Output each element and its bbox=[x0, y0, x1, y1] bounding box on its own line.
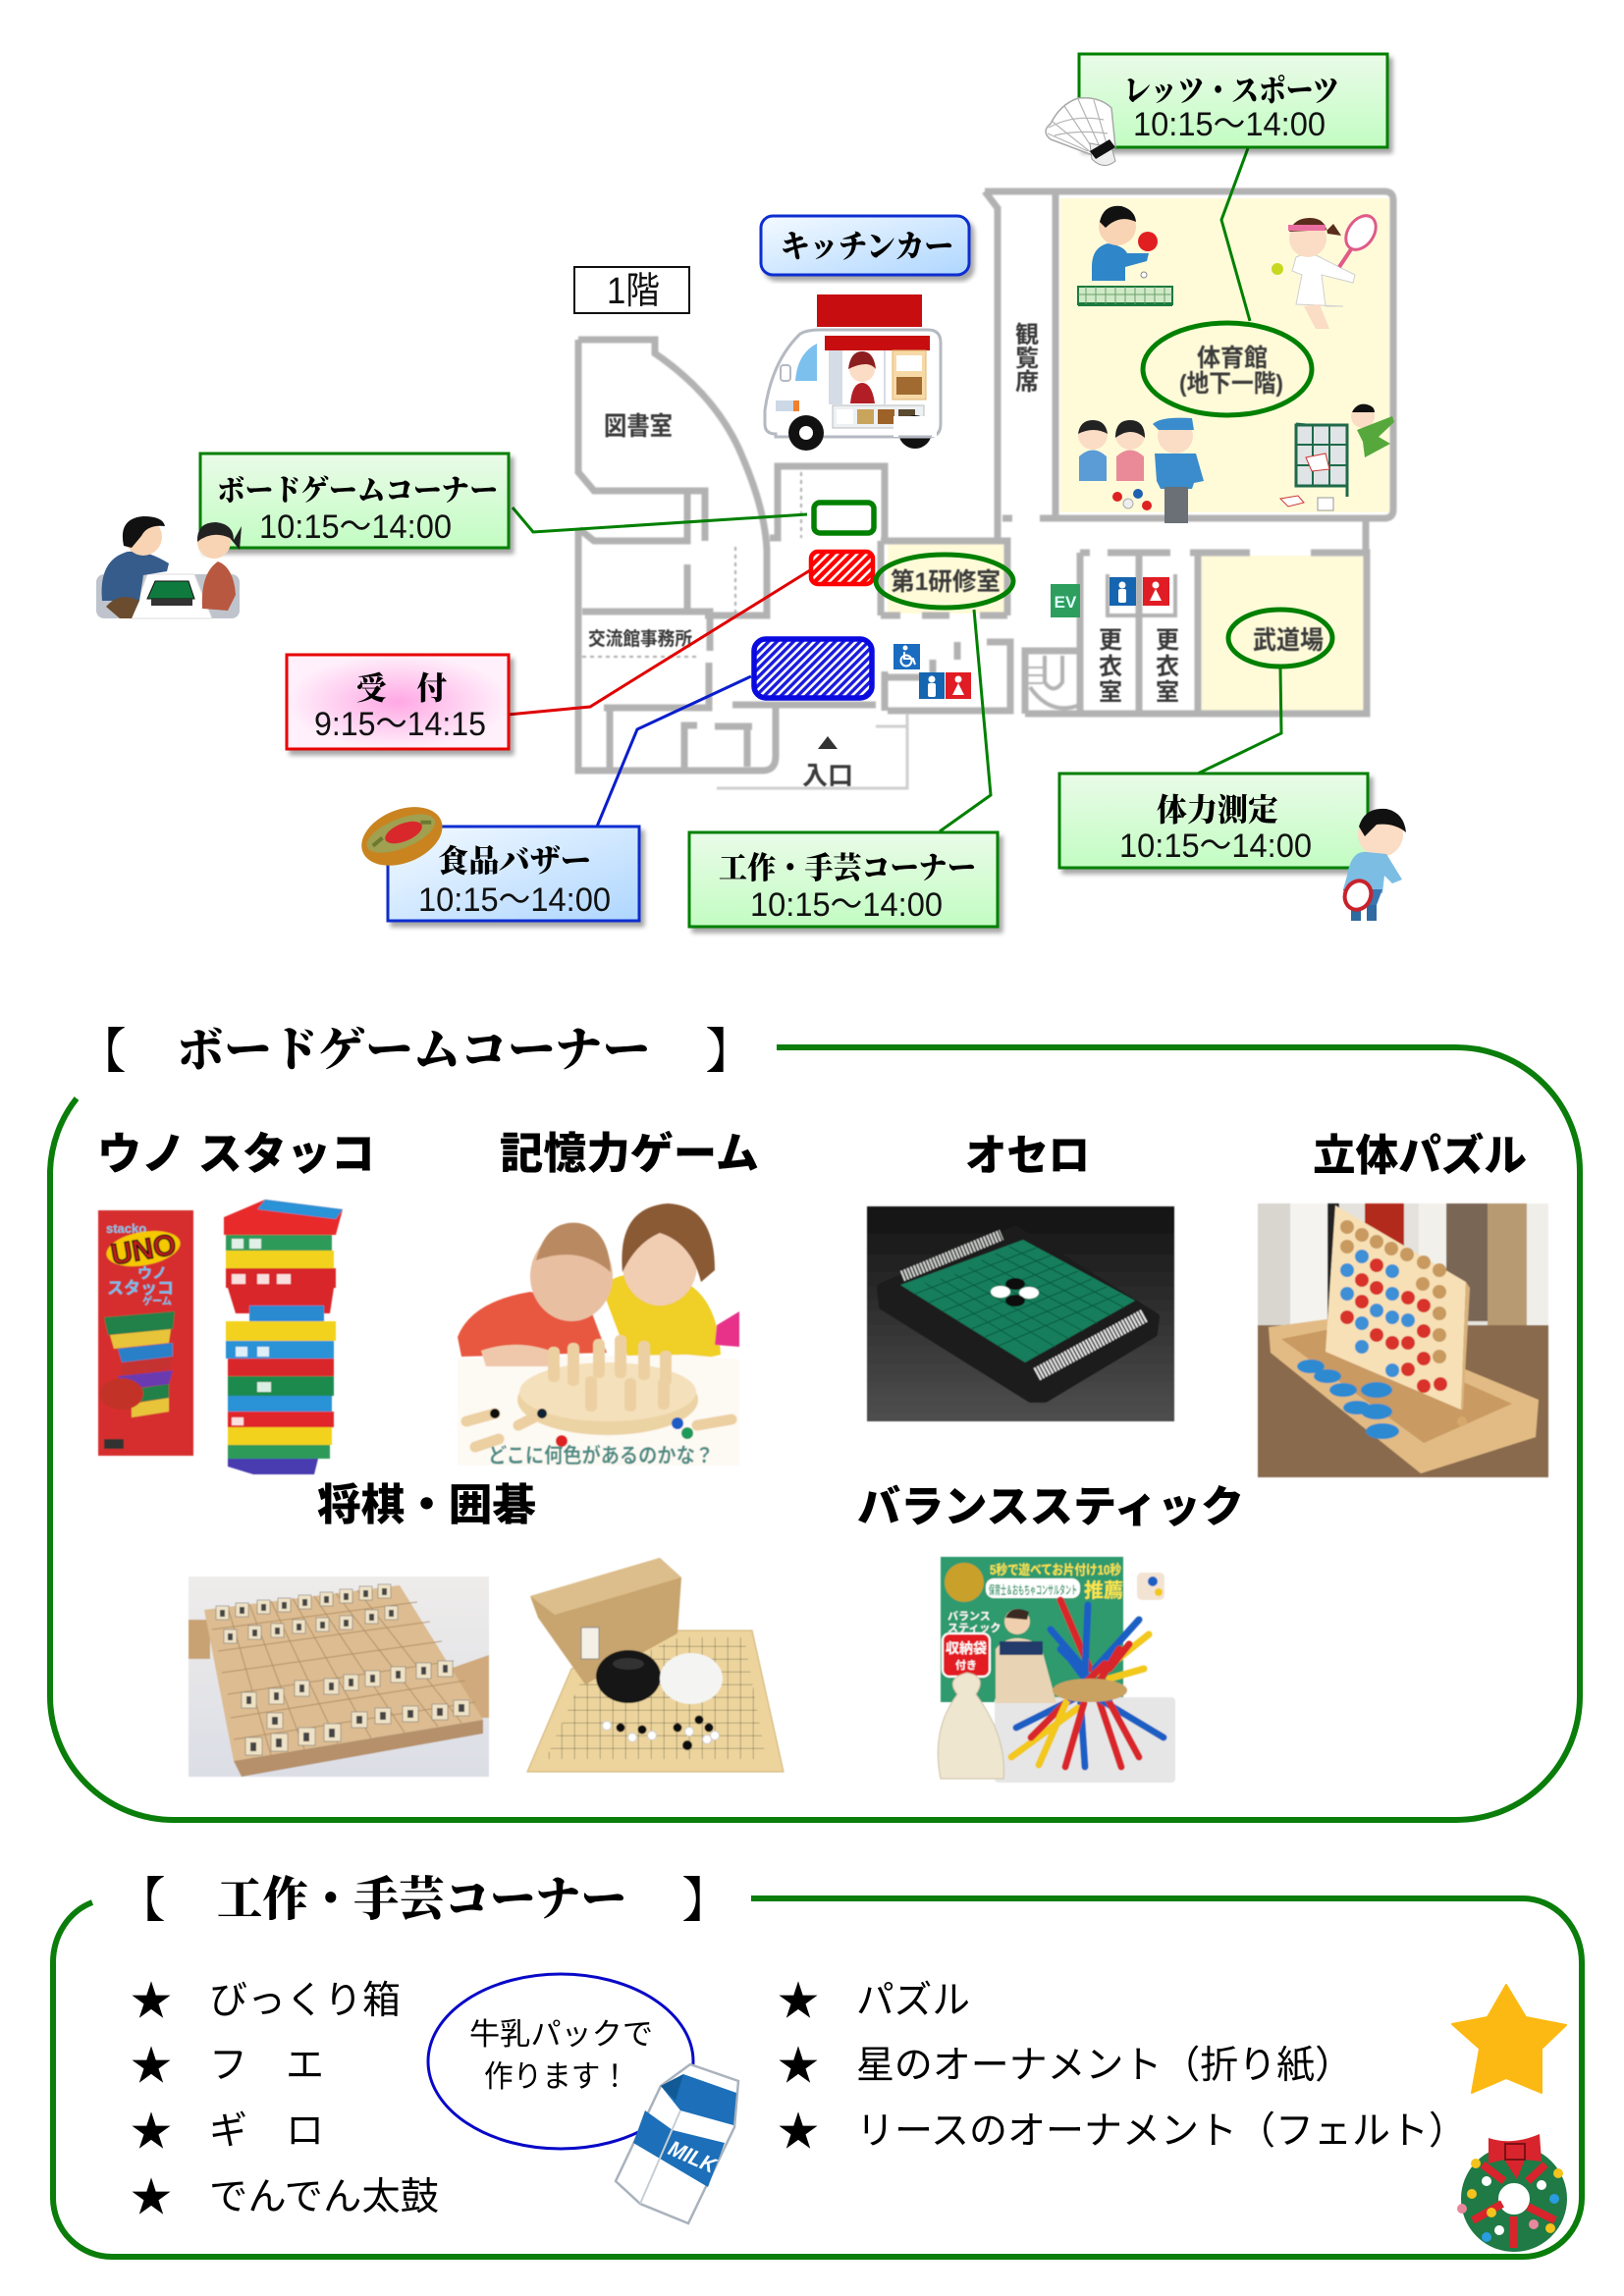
craft list right bbox=[778, 1978, 1467, 2155]
photo: balance stick: 推薦 bbox=[1084, 1579, 1123, 1602]
map labels: 体育館 bbox=[1197, 345, 1268, 372]
callout: reception: 受 付 bbox=[356, 670, 447, 706]
callout: fitness bbox=[1059, 774, 1368, 868]
callout: board game: ボードゲームコーナー bbox=[217, 475, 498, 507]
connector: bazaar bbox=[597, 676, 751, 827]
icon: gold star bbox=[1452, 1985, 1566, 2093]
map labels: 更 bbox=[1156, 627, 1179, 654]
callout: food bazaar bbox=[388, 827, 639, 921]
callout: sports bbox=[1079, 54, 1387, 147]
craft list left: ★ bbox=[131, 2174, 172, 2220]
callout: craft: 10:15～14:00 bbox=[750, 886, 943, 924]
connector: craft bbox=[940, 610, 991, 831]
marker: reception bbox=[811, 552, 873, 584]
title: UNO Stacko: ウノ スタッコ bbox=[97, 1129, 375, 1179]
marker: food bazaar bbox=[754, 639, 872, 698]
floor map bbox=[578, 191, 1393, 790]
photo: UNO Stacko box: UNO bbox=[109, 1228, 179, 1272]
connector: reception bbox=[508, 570, 810, 715]
heading: craft corner: 工作・手芸コーナー bbox=[217, 1874, 626, 1926]
panel frame: craft corner bbox=[53, 1898, 1582, 2257]
floor label bbox=[574, 267, 689, 313]
connector: board game bbox=[513, 507, 807, 532]
callout: board game bbox=[200, 454, 509, 548]
callout: craft bbox=[689, 832, 998, 927]
floor label: 1階 bbox=[607, 271, 660, 312]
craft list right: 星のオーナメント（折り紙） bbox=[856, 2045, 1353, 2087]
craft list left bbox=[131, 1978, 439, 2220]
craft list right: リースのオーナメント（フェルト） bbox=[856, 2110, 1467, 2153]
icon: milk carton bbox=[616, 2064, 738, 2223]
map labels: 覧 bbox=[1015, 346, 1039, 372]
map labels: 図書室 bbox=[604, 411, 673, 441]
photo: othello bbox=[867, 1206, 1174, 1421]
heading: craft corner: 】 bbox=[682, 1875, 730, 1927]
photo: UNO Stacko box bbox=[98, 1210, 193, 1456]
map labels bbox=[588, 322, 1324, 790]
map labels: 室 bbox=[1099, 679, 1122, 706]
photo: balance stick: 付き bbox=[955, 1658, 977, 1672]
photo: balance stick: 保育士＆おもちゃコンサルタント bbox=[989, 1582, 1077, 1597]
callout: food bazaar: 10:15～14:00 bbox=[418, 881, 611, 919]
callout: sports: レッツ・スポーツ bbox=[1123, 73, 1339, 108]
map labels: 更 bbox=[1099, 627, 1122, 654]
ellipse: gym bbox=[1143, 323, 1312, 415]
icon: shuttlecock bbox=[1046, 98, 1115, 166]
heading: board game corner: ボードゲームコーナー bbox=[177, 1025, 650, 1077]
title: shogi and go: 将棋・囲碁 bbox=[317, 1481, 536, 1529]
callout: board game: 10:15～14:00 bbox=[259, 508, 452, 546]
photo: balance stick: 収納袋 bbox=[946, 1640, 987, 1656]
craft list right: ★ bbox=[778, 1978, 819, 2024]
photo: UNO Stacko box: スタッコ bbox=[107, 1279, 174, 1298]
icon: wheelchair bbox=[893, 644, 920, 669]
craft list left: ★ bbox=[131, 2109, 172, 2155]
photo: memory game: どこに何色があるのかな？ bbox=[488, 1444, 714, 1468]
walls bbox=[578, 191, 1393, 788]
photo: UNO Stacko tower bbox=[224, 1200, 343, 1474]
map labels: 席 bbox=[1015, 369, 1039, 396]
map labels: 第1研修室 bbox=[891, 568, 1001, 596]
panel frame: board game corner bbox=[50, 1047, 1580, 1820]
photo: memory game bbox=[458, 1203, 739, 1468]
callout: sports: 10:15～14:00 bbox=[1133, 106, 1326, 143]
photo: balance stick: バランス bbox=[947, 1610, 991, 1623]
ellipse: training room bbox=[876, 555, 1013, 608]
craft list right: パズル bbox=[856, 1980, 970, 2022]
speech ellipse: milk carton note: 牛乳パックで bbox=[469, 2017, 653, 2052]
icon: hot dog bbox=[352, 796, 451, 877]
photo: UNO Stacko box: ゲーム bbox=[142, 1295, 172, 1308]
map labels: 観 bbox=[1015, 322, 1039, 348]
ellipse: dojo bbox=[1228, 610, 1332, 667]
photo: UNO Stacko box: ウノ bbox=[137, 1265, 167, 1282]
icon: wreath bbox=[1457, 2134, 1563, 2248]
icon: tennis girl bbox=[1272, 210, 1382, 329]
icon: net target game bbox=[1280, 404, 1394, 510]
connector: sports bbox=[1221, 148, 1250, 321]
map labels: (地下一階) bbox=[1179, 370, 1283, 398]
connector: fitness bbox=[1198, 668, 1281, 774]
icon: restrooms upper bbox=[1110, 577, 1169, 606]
map labels: 武道場 bbox=[1253, 625, 1324, 655]
title: memory game: 記憶力ゲーム bbox=[500, 1130, 759, 1178]
craft list left: フ エ bbox=[209, 2045, 324, 2087]
callout: reception: 9:15～14:15 bbox=[314, 706, 486, 743]
map labels: 交流館事務所 bbox=[588, 628, 692, 650]
photo: balance stick: 5秒で遊べてお片付け10秒 bbox=[990, 1562, 1121, 1577]
heading: board game corner: 【 bbox=[79, 1026, 126, 1078]
photo: go set bbox=[527, 1558, 784, 1772]
icon: milk carton: MILK bbox=[665, 2136, 722, 2179]
heading: craft corner bbox=[118, 1874, 730, 1927]
icon: ping pong player bbox=[1078, 206, 1172, 304]
icon: EV: EV bbox=[1055, 593, 1077, 612]
callout: kitchen car bbox=[761, 216, 969, 275]
map labels: 入口 bbox=[802, 761, 853, 790]
callout: reception bbox=[287, 655, 509, 749]
heading: craft corner: 【 bbox=[118, 1875, 165, 1927]
photo: UNO Stacko box: stacko bbox=[106, 1221, 146, 1236]
craft list left: ギ ロ bbox=[209, 2110, 324, 2153]
photo: shogi board bbox=[189, 1576, 489, 1777]
icon: EV bbox=[1051, 584, 1080, 617]
callout: fitness: 10:15～14:00 bbox=[1119, 828, 1312, 865]
entrance arrow bbox=[818, 736, 838, 749]
map labels: 室 bbox=[1156, 679, 1179, 706]
map labels: 衣 bbox=[1156, 654, 1179, 680]
callout: food bazaar: 食品バザー bbox=[438, 843, 591, 879]
craft list right: ★ bbox=[778, 2109, 819, 2155]
photo: balance stick: スティック bbox=[947, 1622, 1001, 1634]
callout: kitchen car: キッチンカー bbox=[781, 229, 953, 264]
callout: fitness: 体力測定 bbox=[1157, 792, 1278, 828]
icon: kids playing board game bbox=[96, 516, 242, 618]
heading: board game corner: 】 bbox=[706, 1026, 753, 1078]
icon: boy using grip dynamometer bbox=[1340, 809, 1406, 921]
icon: two kids and man with boccia balls bbox=[1078, 418, 1204, 523]
callout: craft: 工作・手芸コーナー bbox=[719, 851, 976, 885]
title: 3D puzzle: 立体パズル bbox=[1313, 1131, 1527, 1180]
craft list left: でんでん太鼓 bbox=[209, 2176, 439, 2218]
map labels: 衣 bbox=[1099, 654, 1122, 680]
title: othello: オセロ bbox=[965, 1132, 1090, 1180]
photo: balance stick bbox=[938, 1557, 1175, 1783]
speech ellipse: milk carton note: 作ります！ bbox=[484, 2059, 629, 2094]
craft list left: ★ bbox=[131, 1978, 172, 2024]
icon: kitchen car bbox=[765, 294, 941, 451]
room fills bbox=[888, 198, 1389, 711]
photo: connect four puzzle bbox=[1258, 1203, 1548, 1477]
title: balance stick: バランススティック bbox=[857, 1483, 1244, 1531]
marker: board game bbox=[814, 503, 874, 533]
heading: board game corner bbox=[79, 1025, 753, 1078]
craft list left: ★ bbox=[131, 2043, 172, 2089]
icon: restrooms lower bbox=[919, 672, 971, 699]
craft list right: ★ bbox=[778, 2043, 819, 2089]
craft list left: びっくり箱 bbox=[209, 1980, 401, 2022]
speech ellipse: milk carton note bbox=[428, 1974, 693, 2149]
